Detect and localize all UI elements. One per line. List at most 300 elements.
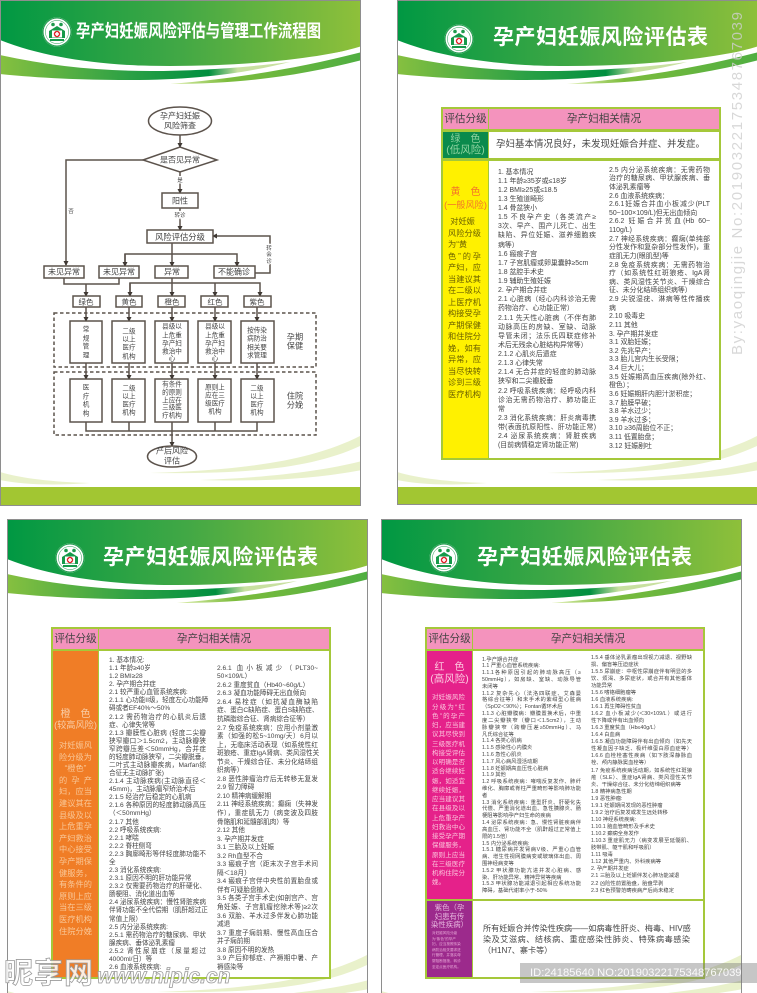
purple conditions cell	[473, 901, 703, 977]
orange conditions right column	[217, 664, 319, 971]
yellow conditions right column: 病、类风湿性关节炎、干燥综合	[609, 279, 710, 286]
orange grade description: 医疗机构	[59, 915, 92, 924]
orange conditions left column: 狭窄瓣口＞1.5cm2，主动脉瓣狭	[109, 738, 206, 745]
yellow grade description: 诊到三级	[448, 378, 481, 387]
orange grade cell	[53, 651, 98, 977]
flow labels: 橙色	[164, 296, 180, 306]
red grade description: 妇，应当建	[432, 722, 465, 729]
red conditions left column: 1.1.2 复杂先心（法洛四联症、艾森曼	[482, 691, 581, 697]
orange conditions right column: 上，无临床活动表现（如系统性红	[217, 742, 318, 749]
yellow conditions left column: 1.4 骨盆狭小	[498, 205, 537, 212]
red conditions right column: 2.3 红色预警范畴疾病产后尚未稳定	[591, 888, 674, 894]
orange conditions right column: 作），重症肌无力（病变波及四肢	[217, 810, 318, 817]
flow nodes: start and decision	[44, 107, 274, 467]
red grade label	[430, 661, 469, 684]
red conditions left column: 代偿、严重消化道出血、急性胰腺炎、肠	[482, 806, 581, 812]
watermark: id bar	[520, 963, 757, 983]
red grade description: 三级医疗机	[432, 741, 465, 748]
yellow conditions right column: 2.7 神经系统疾病：癫痫(单纯部	[609, 236, 710, 243]
orange conditions left column: 2.2 呼吸系统疾病:	[109, 827, 161, 834]
orange grade description: 健服务，	[59, 869, 92, 878]
yellow conditions left column: 1.5 不良孕产史（各类流产≥	[498, 214, 596, 221]
red conditions left column: 1.孕产期合并症	[482, 657, 518, 663]
flowchart: 机	[83, 400, 90, 408]
yellow conditions right column: 3.4 巨大儿；	[609, 365, 648, 372]
red grade description: 上危重孕产	[432, 815, 465, 822]
yellow conditions left column: 1.7 子宫肌瘤或卵巢囊肿≥5cm	[498, 260, 588, 267]
orange conditions left column: 常值上限）	[109, 916, 142, 922]
yellow grade description: 产妇，应	[448, 263, 481, 272]
watermark: vertical author id: By:yaoqingjie No:20190322175348767039	[729, 12, 746, 355]
flowchart: 机构	[250, 408, 264, 416]
orange grade description: 原则上应	[59, 892, 92, 901]
orange conditions right column: 素（如强的松5~10mg/天）6月以	[217, 733, 318, 740]
header: conditions: 孕产妇相关情况	[567, 113, 641, 125]
red conditions left column: 度二尖瓣狭窄（瓣口＜1.5cm2），主动	[482, 718, 581, 724]
yellow conditions left column: 2.1.3 心律失常	[498, 360, 543, 367]
green grade label: 绿 色	[450, 134, 480, 144]
yellow conditions right column: 分性发作和复杂部分性发作)，重	[609, 244, 710, 251]
orange grade label	[54, 708, 97, 730]
flowchart: 原则上	[205, 382, 225, 392]
yellow conditions left column: 2. 孕产期合并症	[498, 287, 547, 294]
red conditions right column: 1.5.5 尿崩症：中枢性尿崩症伴有明显的多	[591, 669, 692, 675]
yellow conditions right column: 3.2 先兆早产；	[609, 348, 655, 355]
red conditions right column: 性下降或伴有出血倾向	[591, 718, 644, 724]
red grade description: 在三级医疗	[432, 861, 465, 868]
red grade description: 色”的孕产	[432, 713, 465, 720]
red conditions left column: 1.1.6 急性心肌炎	[482, 752, 522, 758]
orange conditions left column: 2.3 消化系统疾病:	[109, 867, 161, 874]
orange conditions right column: 织病等）	[217, 767, 243, 774]
flowchart: 以上	[122, 392, 136, 400]
orange grade label: (较高风险)	[54, 720, 97, 730]
orange conditions left column: （＜50mmHg）	[109, 810, 156, 817]
red conditions left column: 1.5.2 甲状腺功能亢进并发心脏病、感	[482, 868, 581, 874]
red grade description: 以明确是否	[432, 759, 465, 766]
header: conditions	[489, 109, 719, 129]
orange conditions right column: 褥感染等	[217, 964, 243, 971]
orange conditions right column: 骨骼肌和延髓部肌肉）等	[217, 819, 290, 826]
flow labels: 红色	[208, 296, 223, 306]
yellow conditions left column: 狭窄和二尖瓣脱垂	[498, 378, 553, 385]
yellow conditions right column: 疗（如系统性红斑狼疮、IgA肾	[609, 270, 710, 277]
flow labels: 是	[177, 177, 183, 184]
flow labels: 未见异常	[103, 266, 135, 276]
flow labels: 产后风险	[156, 446, 188, 456]
panel: risk table, orange	[7, 519, 368, 993]
flow labels: 绿色	[78, 296, 94, 306]
orange grade description: 有条件的	[59, 880, 92, 889]
flow labels: 保健	[287, 340, 303, 350]
yellow grade description: 当尽快转	[448, 366, 481, 376]
yellow conditions right column: 治疗的糖尿病、甲状腺疾病、垂	[609, 175, 710, 182]
red conditions right column: 1.6.1 再生障碍性贫血	[591, 704, 641, 710]
orange conditions right column: 3.7 重度子痫前期、慢性高血压合	[217, 930, 318, 937]
red conditions left column: 高血压、肾功能不全（肌酐超过正常值上	[482, 827, 581, 833]
orange conditions left column: 碍或者EF40%～50%	[109, 705, 170, 712]
red conditions left column: 限的1.5倍）	[482, 834, 511, 840]
flowchart: 构	[83, 408, 90, 418]
purple grade description: 行管理，并落实母	[432, 953, 461, 957]
header: grade: 评估分级	[54, 633, 97, 645]
red conditions right column: 1.8 精神病急性期	[591, 789, 632, 795]
red conditions left column: 未闭等	[482, 684, 498, 690]
orange conditions left column: 2.1.2 需药物治疗的心肌炎后遗	[109, 714, 206, 721]
flow labels: 会	[266, 250, 272, 258]
flowchart: 上危重	[162, 330, 182, 340]
orange conditions right column: 2.12 其他	[217, 827, 245, 834]
yellow conditions left column: 药物治疗、心功能正常）	[498, 305, 574, 312]
red conditions left column: 病、增生性视网膜病变或玻璃体出血、周	[482, 854, 581, 860]
title: 孕产妇妊娠风险评估与管理工作流程图	[76, 22, 321, 42]
flowchart: 医	[83, 384, 90, 392]
icon: hospital logo	[444, 24, 474, 54]
red conditions right column: 1.9.2 治疗后复发或发生远处转移	[591, 810, 668, 816]
orange conditions left column: 2.5.2 肾性尿崩症（尿量超过	[109, 948, 206, 955]
purple grade description	[432, 930, 461, 969]
red conditions right column: 栓、颅内静脉窦血栓等）	[591, 760, 649, 766]
flow labels: 转	[266, 244, 272, 252]
yellow grade label	[444, 186, 487, 210]
orange conditions left column: 2.1.3 瓣膜性心脏病 (轻度二尖瓣	[109, 730, 206, 737]
orange conditions right column: 3.8 原因不明的发热	[217, 947, 274, 954]
yellow conditions left column: 导管未闭；法乐氏四联症修补	[498, 333, 596, 340]
green grade label: (低风险)	[446, 144, 485, 156]
flow labels: 阳性	[172, 196, 188, 206]
purple conditions text	[483, 924, 691, 954]
red conditions left column: 1.1.7 风心病风湿活动期	[482, 759, 538, 765]
red conditions left column: 障碍，基础代谢率小于-50%	[482, 888, 547, 894]
yellow conditions right column: 体泌乳素瘤等	[609, 184, 650, 191]
flowchart: 三级医	[162, 402, 182, 412]
purple grade description: 病防治相关要求进	[432, 948, 461, 952]
orange conditions left column: 窄跨瓣压差＜50mmHg，合并症	[109, 746, 206, 753]
orange conditions right column: 2.6.1 血小板减少（PLT30~	[217, 665, 318, 672]
footer bar	[1, 487, 361, 505]
yellow conditions right column: 2.6.1妊娠合并血小板减少(PLT	[609, 201, 710, 208]
flow labels: 黄色	[122, 296, 137, 306]
flowchart: 的原则	[162, 388, 182, 396]
header: grade	[443, 109, 488, 129]
red grade description: 保健服务，	[432, 842, 465, 849]
yellow conditions left column: (目前病情稳定肾功能正常)	[498, 442, 578, 449]
orange conditions right column: 症、蛋白C缺陷症、蛋白S缺陷症、	[217, 707, 318, 714]
orange conditions left column: 2.1.7 其他	[109, 819, 139, 826]
orange conditions right column: 3.2 Rh血型不合	[217, 853, 263, 860]
header: grade: 评估分级	[428, 633, 471, 645]
red conditions right column: 性凝血因子缺乏、极纤维蛋白原血症等）	[591, 746, 692, 752]
red grade description: 原则上应当	[432, 852, 465, 859]
flow labels: 未见异常	[48, 266, 80, 276]
flowchart: 医疗	[122, 400, 136, 408]
orange conditions right column: 减退	[217, 921, 230, 928]
header: conditions: 孕产妇相关情况	[551, 633, 625, 645]
purple grade label: 紫色（孕	[435, 903, 464, 912]
yellow conditions left column: 1.2 BMI≥25或≤18.5	[498, 187, 557, 194]
orange conditions left column: 2.1 较严重心血管系统疾病:	[109, 689, 188, 696]
orange conditions right column: 2.10 精神病缓解期	[217, 793, 271, 800]
yellow conditions right column: 50~100×109/L)但无出血倾向	[609, 210, 697, 217]
orange conditions left column	[109, 656, 208, 971]
yellow conditions right column: 3. 孕产期并发症	[609, 331, 658, 338]
red conditions left column: 1.1.8 妊娠期高血压性心脏病	[482, 766, 548, 772]
purple conditions text: （H1N7、寨卡等）	[483, 946, 552, 954]
orange conditions right column: 并子痫前期	[217, 938, 250, 945]
icon: hospital logo	[429, 543, 459, 573]
yellow grade description: 产期保健	[448, 320, 481, 330]
flowchart: 相关要	[247, 342, 267, 352]
yellow conditions right column	[609, 166, 710, 450]
orange conditions right column: 3.6 双胎、羊水过多伴发心肺功能	[217, 913, 318, 920]
red grade description: 机构住院分	[432, 870, 465, 877]
red conditions left column: 维化、胸廓或脊柱严重畸形等影响肺功能	[482, 786, 581, 792]
red conditions right column: 1.5.6 嗜铬细胞瘤等	[591, 690, 636, 696]
red conditions left column: 凡氏综合征等	[482, 732, 514, 738]
yellow grade label: 黄 色	[450, 187, 480, 198]
red grade description: 适合继续妊	[432, 768, 465, 775]
flowchart: 孕产妇	[205, 338, 225, 348]
flow labels: 异常	[164, 268, 180, 276]
orange conditions left column: 2.2.1 哮喘	[109, 835, 139, 842]
yellow grade description: 异常，应	[448, 355, 481, 364]
header: grade	[53, 629, 98, 649]
flowchart: 以上	[122, 334, 136, 344]
orange conditions right column: 2.6.2 重度贫血（Hb40~60g/L）	[217, 682, 309, 689]
flowchart: 按传染	[247, 326, 267, 334]
panel: risk assessment and management workflow	[0, 0, 361, 506]
orange conditions right column: 节炎、干燥综合征、未分化结缔组	[217, 759, 318, 766]
purple conditions text: 所有妊娠合并传染性疾病——如病毒性肝炎、梅毒、HIV感	[483, 924, 691, 932]
title: 孕产妇妊娠风险评估表	[103, 546, 318, 569]
orange grade label: 橙 色	[60, 709, 90, 720]
flowchart: 县级以	[162, 322, 182, 330]
yellow conditions right column: 2.6 血液系统疾病：	[609, 193, 669, 200]
yellow grade description: 医疗机构	[448, 390, 481, 398]
yellow grade label: (一般风险)	[444, 200, 487, 210]
red conditions right column: 炎、干燥综合征、未分化结缔组织病等	[591, 782, 681, 788]
flow labels: 是否见异常	[160, 156, 200, 164]
flowchart: 管	[83, 342, 90, 350]
red conditions left column: 1.1.1各种原因引起的肺动脉高压（≥	[482, 670, 581, 676]
red conditions left column: 1.1 严重心血管系统疾病:	[482, 663, 540, 669]
watermark: site name: 昵享网www.nipic.cn	[4, 958, 230, 990]
flowchart: 上应在	[162, 396, 182, 404]
yellow conditions left column: 2.1.1 先天性心脏病（不伴有肺	[498, 314, 596, 322]
yellow conditions left column: 带(表面抗原阳性、肝功能正常)	[498, 424, 596, 431]
flowchart: 级医疗	[205, 398, 225, 408]
watermark: id bar: ID:24185640 NO:20190322175348767039	[530, 967, 742, 979]
purple conditions text: 染及艾滋病、结核病、重症感染性肺炎、特殊病毒感染	[483, 934, 690, 944]
red grade description: 对妊娠风险	[432, 694, 465, 701]
orange conditions right column: 2.6.3 凝血功能障碍无出血倾向	[217, 690, 306, 697]
green grade cell	[443, 132, 488, 158]
yellow grade description: 风险分级	[448, 228, 481, 238]
red grade description: 娩。	[432, 879, 445, 886]
yellow conditions left column: 2.1 心脏病（经心内科诊治无需	[498, 296, 596, 303]
orange conditions left column: 2.2.3 胸廓畸形等伴轻度肺功能不	[109, 851, 206, 858]
purple grade label: 妇患有传	[435, 912, 464, 920]
red conditions right column: 1.6.4 白血病	[591, 732, 620, 738]
orange grade description: 对妊娠风	[59, 741, 92, 750]
yellow conditions left column: 1.9 辅助生殖妊娠	[498, 278, 551, 285]
red conditions right column: 饮、烦渴、多尿症状，或合并有其他垂体	[591, 676, 692, 682]
orange conditions left column: 2.2.2 脊柱侧弯	[109, 843, 152, 850]
orange conditions left column: 肠梗阻、消化道出血等	[109, 891, 175, 898]
red conditions right column: 1.6 血液系统疾病:	[591, 697, 633, 703]
yellow conditions left column: 术后无残余心脏结构异常等）	[498, 342, 588, 349]
yellow conditions right column: 2.8 免疫系统疾病：无需药物治	[609, 262, 710, 269]
orange conditions right column: 伴有可疑胎盘植入	[217, 887, 270, 894]
header banner and swooshes	[398, 1, 757, 484]
orange conditions right column: 角妊娠、子宫肌瘤挖除术等)≥2次	[217, 904, 318, 911]
red conditions right column: 1.11 吸毒	[591, 852, 613, 858]
panel: risk table, red and purple	[381, 519, 742, 993]
red conditions left column: 染、肝功能异常、精神异常等疾病	[482, 875, 561, 881]
yellow grade description: 为“黄	[448, 240, 467, 249]
flow labels: 分娩	[287, 400, 303, 410]
flow labels	[48, 110, 303, 466]
red grade description	[432, 694, 465, 886]
red conditions right column	[591, 654, 692, 894]
flowchart: 医疗	[122, 342, 136, 352]
red conditions left column: 1.1.9 其他	[482, 772, 506, 778]
orange conditions left column: 2. 孕产期合并症	[109, 681, 156, 688]
purple grade cell	[427, 901, 472, 977]
flowchart: 医疗	[250, 400, 264, 408]
red grade description: 在县级及以	[432, 805, 465, 812]
orange conditions left column: 2.1.5 经治疗后稳定的心肌病	[109, 794, 191, 801]
yellow conditions left column: 1.3 生殖道畸形	[498, 196, 544, 203]
yellow grade description: 构接受孕	[448, 309, 481, 318]
flow labels: 否	[68, 208, 74, 215]
red grade label: (高风险)	[430, 672, 469, 684]
red conditions right column: 1.7 免疫系统疾病活动期，如系统性红斑狼	[591, 768, 692, 774]
red conditions left column: （SpO2＜90%）；Fontan循环术后	[482, 704, 562, 710]
orange conditions left column: 2.5 内分泌系统疾病:	[109, 924, 168, 931]
red conditions left column	[482, 656, 581, 894]
orange grade description: 县级及以	[59, 811, 92, 820]
red conditions right column: 1.9.1 妊娠期间发现的恶性肿瘤	[591, 803, 663, 809]
yellow grade description: 上医疗机	[448, 298, 481, 306]
orange conditions right column: 隔＜18月）	[217, 870, 251, 877]
purple grade label: 染性疾病）	[431, 920, 468, 929]
red conditions left column: 50mmHg），如房缺、室缺、动脉导管	[482, 677, 581, 683]
flowchart: 以上	[250, 392, 264, 400]
red conditions left column: 1.1.4 各类心肌病	[482, 738, 522, 744]
yellow conditions right column: 2.9 尖锐湿疣、淋病等性传播疾	[609, 296, 710, 303]
flow labels: 孕产妇妊娠	[160, 110, 200, 120]
flowchart: 理	[83, 352, 90, 360]
flowchart: 常	[83, 324, 90, 334]
yellow conditions left column: 常	[498, 406, 505, 413]
flowchart: 有条件	[162, 380, 182, 388]
header banner and swooshes	[382, 520, 741, 993]
orange conditions left column: 2.6 血液系统疾病:	[109, 964, 161, 971]
red conditions left column: 格综合征等）和未手术的紫绀型心脏病	[482, 697, 581, 703]
flowchart: 救治中	[205, 346, 225, 356]
orange conditions left column: 2.1.4 主动脉疾病(主动脉直径＜	[109, 778, 206, 785]
red conditions right column: 1.9 恶性肿瘤:	[591, 796, 622, 802]
orange conditions left column: 2.1.6 各种原因的轻度肺动脉高压	[109, 802, 206, 809]
yellow conditions left column: 1.8 盆腔手术史	[498, 269, 544, 276]
flow labels: 转诊	[174, 211, 186, 219]
yellow grade cell	[443, 161, 488, 458]
red conditions left column: 梗阻等影响孕产妇生命的疾病	[482, 813, 551, 819]
red conditions left column: 1.5.1 糖尿病并发肾病V级、严重心血管	[482, 847, 581, 853]
flowchart: 应在三	[205, 390, 225, 400]
yellow conditions right column: 病	[609, 305, 616, 312]
flowchart: 机构	[122, 352, 136, 360]
yellow conditions left column: 2.3 消化系统疾病：肝炎病毒携	[498, 415, 596, 422]
red conditions right column: 2. 孕产期并发症	[591, 866, 629, 872]
red conditions left column: 围神经病变等	[482, 861, 514, 867]
red grade cell	[427, 651, 472, 899]
yellow conditions right column: 3.10 ≥36周胎位不正；	[609, 425, 677, 432]
orange grade description: 险分级为	[59, 753, 92, 762]
yellow conditions right column: 征、未分化结缔组织病等）	[609, 287, 692, 294]
orange conditions right column: 3.4 瘢痕子宫伴中央性前置胎盘或	[217, 878, 318, 885]
orange conditions right column: 3.9 产后抑郁症、产褥期中暑、产	[217, 955, 318, 962]
orange conditions left column: 腺疾病、垂体泌乳素瘤	[109, 940, 175, 947]
yellow conditions left column: 诊治无需药物治疗、肺功能正	[498, 397, 596, 404]
flowchart	[43, 106, 317, 468]
flowchart: 心	[169, 354, 176, 362]
red conditions right column: 肢带肌、躯干肌和呼吸肌）	[591, 845, 655, 851]
header: grade: 评估分级	[444, 113, 487, 125]
yellow conditions right column: 症肌无力(眼肌型)等	[609, 253, 669, 260]
orange grade description: “橙色”	[65, 764, 86, 773]
yellow grade description: 和住院分	[448, 332, 481, 341]
orange grade description: 孕产期保	[59, 857, 92, 866]
red grade label: 红 色	[434, 662, 464, 673]
flowchart: 二级	[122, 326, 136, 336]
orange conditions right column: 2.7 免疫系统疾病：应用小剂量激	[217, 725, 318, 732]
yellow conditions right column: 3.9 羊水过多；	[609, 417, 655, 424]
red conditions right column: 1.10.1 脑血管畸形及手术史	[591, 824, 655, 830]
orange conditions left column: 症、心律失常等	[109, 722, 155, 729]
icon: hospital logo	[42, 17, 72, 47]
orange conditions left column: 的轻度肺动脉狭窄，二尖瓣脱垂，	[109, 754, 208, 761]
orange grade description: 建议其在	[59, 799, 92, 808]
red grade description: 继续妊娠，	[432, 787, 465, 794]
orange conditions cell	[99, 651, 329, 977]
header: grade	[427, 629, 472, 649]
purple grade label	[431, 903, 468, 929]
yellow conditions cell	[489, 161, 719, 458]
orange conditions left column: 二叶式主动脉瓣疾病，Marfan综	[109, 762, 206, 769]
yellow conditions left column	[498, 168, 596, 449]
orange grade description: 当在三级	[59, 903, 92, 912]
purple grade description: 为“紫色”的孕产	[432, 937, 456, 941]
flow labels: 评估	[164, 456, 180, 466]
yellow conditions left column: 1.1 年龄≥35岁或≤18岁	[498, 178, 567, 185]
red conditions right column: 疮（SLE）、重症IgA肾病、类风湿性关节	[591, 775, 692, 781]
orange grade description: 妇，应当	[59, 787, 92, 796]
orange conditions left column: 2.5.1 需药物治疗的糖尿病、甲状	[109, 932, 206, 939]
red conditions right column: 2.1 三胎及以上妊娠伴发心肺功能减退	[591, 873, 679, 879]
orange conditions left column: 合征无主动脉扩张)	[109, 770, 164, 777]
flowchart: 县级以	[205, 322, 225, 330]
red conditions right column: 1.5.4 垂体泌乳素瘤出现视力减退、视野缺	[591, 654, 692, 660]
red conditions right column: 功能异常	[591, 683, 612, 689]
yellow conditions left column: 2.1.2 心肌炎后遗症	[498, 351, 557, 358]
red conditions right column: 1.10.2 癫痫全身发作	[591, 831, 639, 837]
red grade description: 接受孕产期	[432, 833, 465, 840]
flowchart: 二级	[122, 384, 136, 392]
orange grade description: 中心接受	[59, 845, 92, 854]
green row text	[489, 132, 719, 158]
